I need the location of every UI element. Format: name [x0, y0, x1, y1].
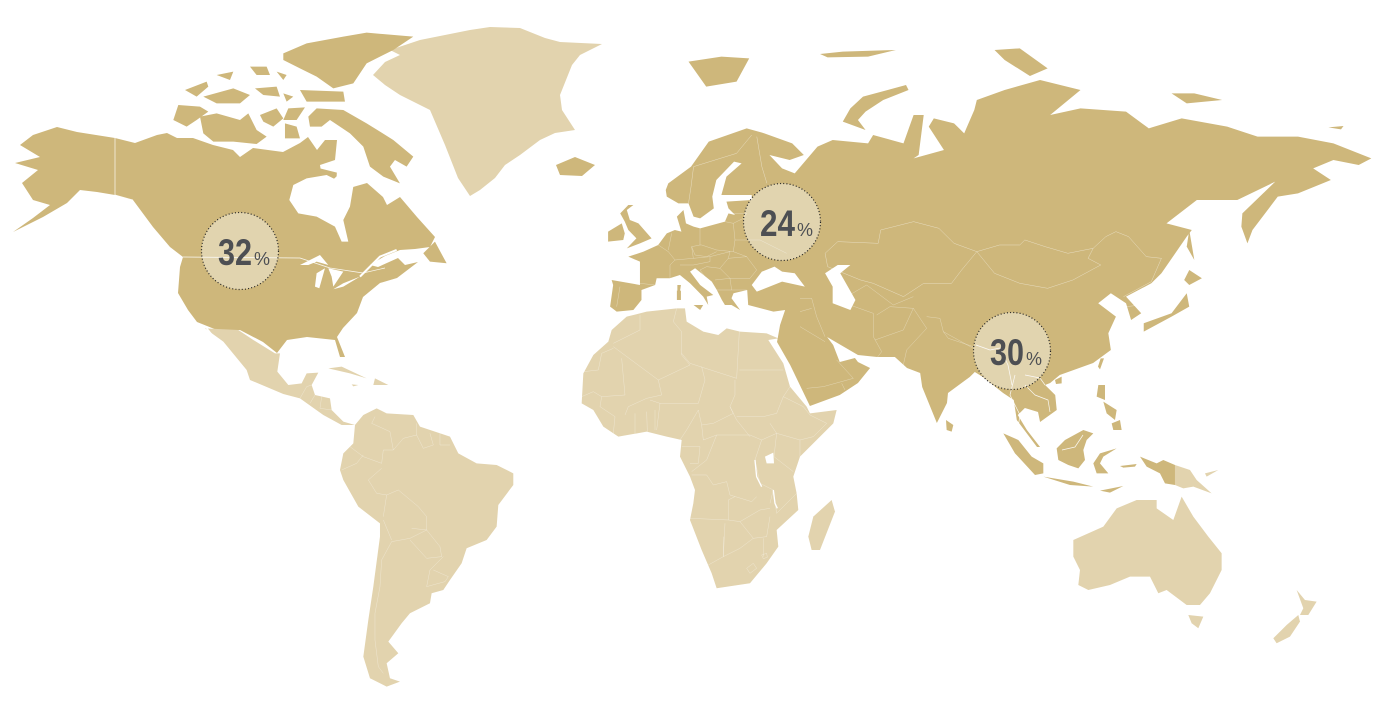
- region: Iceland: [556, 157, 595, 176]
- inland seas: [752, 265, 855, 310]
- region: South America: [340, 408, 513, 687]
- callout: 24%: 24: [760, 203, 795, 244]
- borders: South and Central America: [300, 385, 450, 673]
- region: Mexico, Central America and Caribbean: [205, 328, 388, 425]
- region: New Zealand: [1273, 590, 1317, 643]
- callout: 24%: [744, 184, 820, 260]
- callout: 32%: 32: [218, 232, 252, 273]
- region: Sri Lanka: [946, 420, 953, 432]
- lakes of Africa: [755, 453, 777, 508]
- region: Australia and Papua: [1073, 465, 1317, 643]
- region: Greenland: [373, 27, 602, 196]
- region: Canadian Arctic islands: [173, 33, 447, 263]
- callout: 30%: 30: [990, 332, 1024, 373]
- region: Mediterranean islands: [677, 285, 703, 310]
- region: Eurasia high-share area: [608, 48, 1371, 447]
- callout: 32%: [202, 212, 278, 290]
- borders: Middle East and South Asia: [800, 285, 973, 390]
- borders: Europe: [617, 213, 787, 307]
- borders: Southeast Asia and Canada-US: [115, 138, 1083, 450]
- region: Arctic Eurasian islands: [689, 48, 1344, 130]
- callout: 30%: %: [1026, 349, 1042, 369]
- borders: Africa: [582, 308, 827, 573]
- region: Southeast Asia islands: [1003, 358, 1175, 493]
- callout: 24%: %: [797, 220, 813, 240]
- callout: 30%: [974, 312, 1050, 390]
- borders: Eurasia: [689, 135, 1161, 307]
- region: Africa: [582, 308, 837, 588]
- callout: 32%: %: [254, 249, 270, 269]
- region: Sakhalin and Japan: [1144, 230, 1202, 332]
- region: Hudson Bay and Great Lakes: [289, 135, 397, 289]
- region: Madagascar: [808, 500, 835, 550]
- region: Britain and Ireland: [608, 205, 652, 248]
